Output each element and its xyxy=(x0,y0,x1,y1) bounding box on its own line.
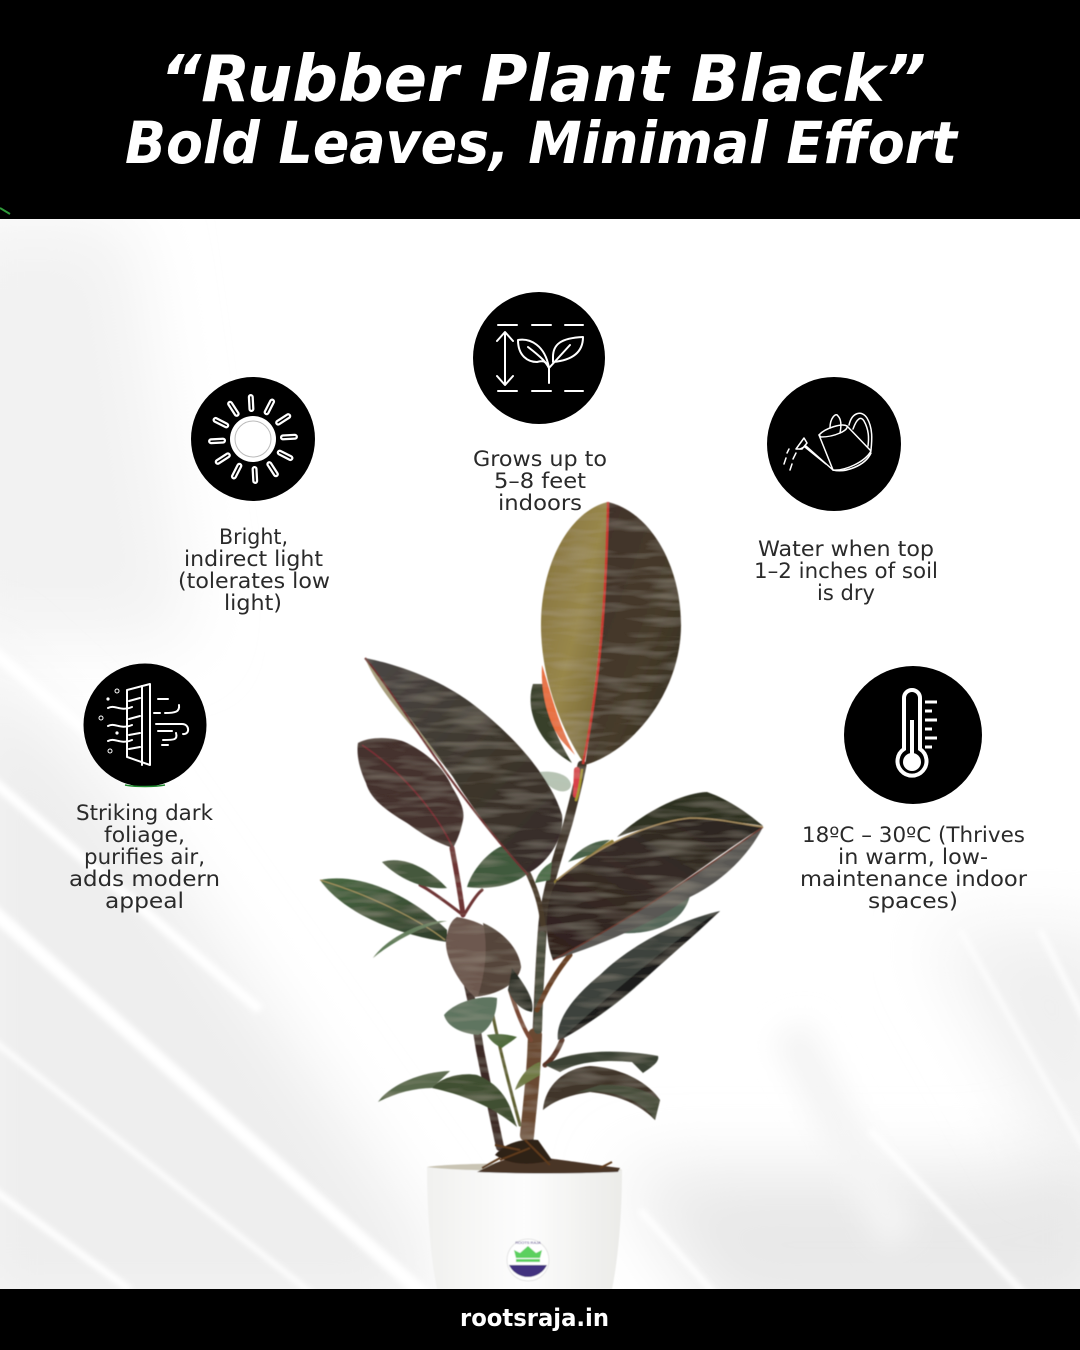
label: temperature: spaces) xyxy=(868,889,958,913)
long right leaf xyxy=(558,911,720,1040)
title line 1: “Rubber Plant Black” xyxy=(160,43,926,117)
left small brown leaf xyxy=(357,738,463,848)
label: light: (tolerates low xyxy=(178,569,330,593)
lower left green leaves xyxy=(320,878,447,958)
label: light: light) xyxy=(224,591,282,615)
label: height: indoors xyxy=(498,491,582,515)
label: light: Bright, xyxy=(219,525,288,549)
label: height xyxy=(473,447,607,515)
soil and roots xyxy=(477,1140,620,1174)
pot logo: ROOTS RAJA xyxy=(515,1240,541,1245)
icon: air purifier filter xyxy=(84,664,206,786)
label: light xyxy=(178,525,330,615)
label: height: Grows up to xyxy=(473,447,607,471)
lower right leaves xyxy=(543,1052,660,1120)
label: height: 5–8 feet xyxy=(494,469,586,493)
icon: height and plant xyxy=(473,292,605,424)
top leaf xyxy=(541,502,681,765)
label: water: Water when top xyxy=(758,537,934,561)
website: rootsraja.in xyxy=(460,1304,609,1332)
small green leaves xyxy=(444,997,540,1090)
label: foliage: Striking dark xyxy=(76,801,214,825)
pot logo xyxy=(507,1239,549,1281)
lower left leaves xyxy=(378,1071,517,1127)
label: foliage: purifies air, xyxy=(84,845,205,869)
pot xyxy=(427,1140,622,1289)
dark leaf beside stem xyxy=(508,968,533,1012)
icon: watering can xyxy=(767,377,901,511)
behind leaves xyxy=(467,846,528,888)
label: temperature xyxy=(800,823,1027,913)
icon: thermometer xyxy=(844,666,982,804)
label: foliage: foliage, xyxy=(104,823,185,847)
label: foliage: adds modern xyxy=(69,867,220,891)
title line 2: Bold Leaves, Minimal Effort xyxy=(125,109,959,177)
label: temperature: in warm, low- xyxy=(838,845,988,869)
header band xyxy=(0,0,1080,219)
icon: sun xyxy=(191,377,315,501)
label: water: is dry xyxy=(817,581,875,605)
large left leaf xyxy=(365,658,562,875)
label: foliage xyxy=(69,801,220,913)
label: light: indirect light xyxy=(184,547,323,571)
small brown centre leaf xyxy=(446,917,521,997)
label: temperature: maintenance indoor xyxy=(800,867,1027,891)
large right leaf xyxy=(547,792,763,960)
label: water: 1–2 inches of soil xyxy=(754,559,938,583)
label: water xyxy=(754,537,938,605)
label: foliage: appeal xyxy=(105,889,184,913)
plant foliage xyxy=(320,502,763,1147)
footer band xyxy=(0,1289,1080,1350)
label: temperature: 18ºC – 30ºC (Thrives xyxy=(802,823,1025,847)
stems xyxy=(420,765,612,1147)
